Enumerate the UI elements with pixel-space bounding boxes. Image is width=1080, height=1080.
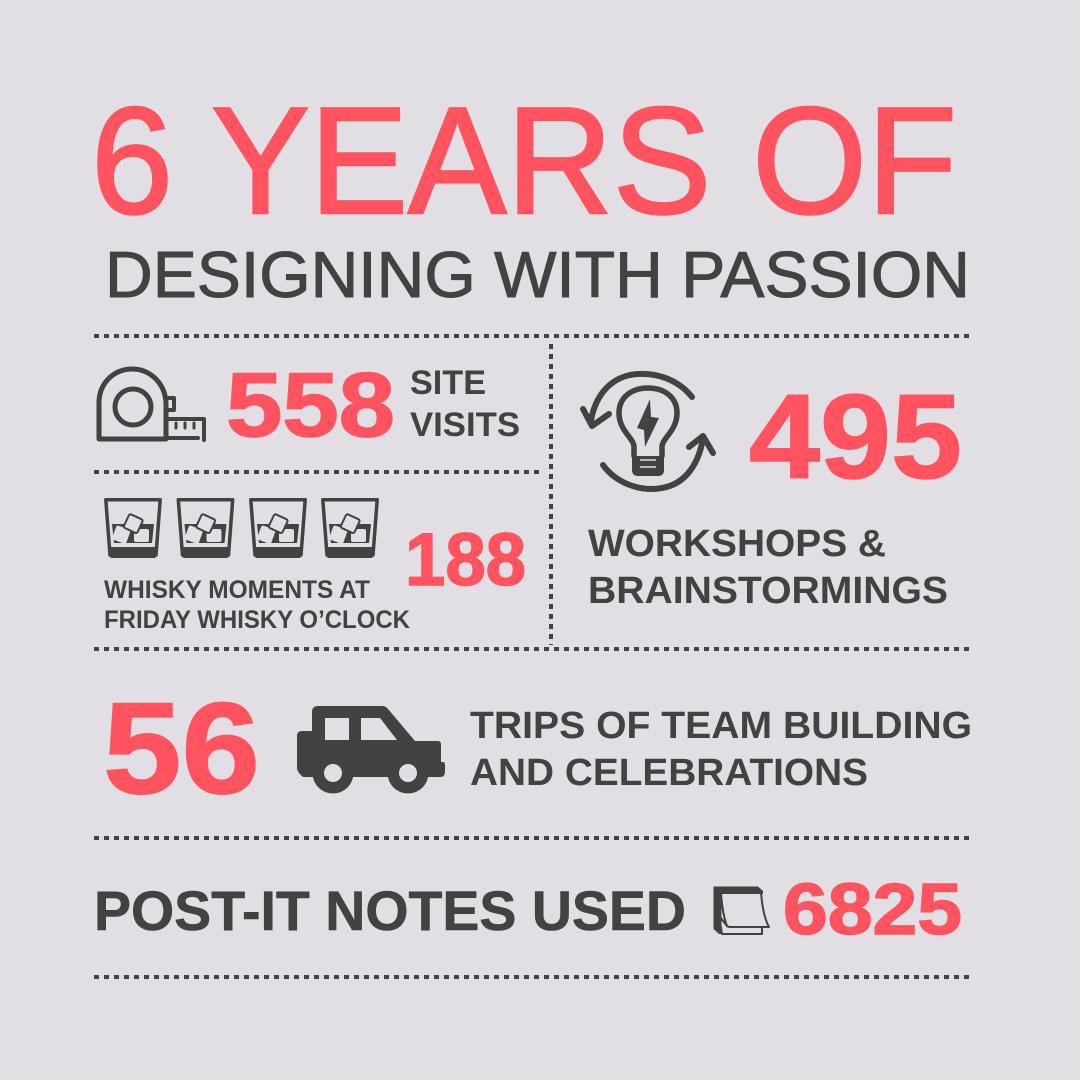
- stat: 6825: 6825: [783, 870, 962, 950]
- icon: whisky glass 3: [251, 500, 305, 558]
- label: whisky moments: FRIDAY WHISKY O’CLOCK: [104, 606, 410, 634]
- label: post-it notes used: POST-IT NOTES USED: [94, 879, 686, 942]
- title: DESIGNING WITH PASSION: [105, 238, 970, 311]
- panel: whisky moments: [104, 500, 526, 634]
- label: workshops and brainstormings: WORKSHOPS &: [588, 523, 886, 565]
- icon: whisky glass 1: [106, 500, 160, 558]
- label: whisky moments: [104, 576, 410, 634]
- panel: post-it notes: [94, 870, 962, 950]
- stat: 188: 188: [405, 518, 526, 601]
- icon: whisky glass 4: [323, 500, 377, 558]
- icon: post-it note: [714, 886, 769, 934]
- label: site visits: [410, 364, 520, 444]
- icon: car: [297, 706, 445, 794]
- label: team trips: TRIPS OF TEAM BUILDING: [470, 705, 972, 747]
- panel: workshops: [583, 370, 962, 612]
- stat: 495: 495: [749, 370, 962, 504]
- panel: site visits: [99, 355, 520, 456]
- label: whisky moments: WHISKY MOMENTS AT: [104, 576, 370, 604]
- label: site visits: SITE: [410, 364, 486, 402]
- label: workshops and brainstormings: [588, 523, 948, 612]
- icon: light bulb with cycle arrows: [583, 374, 713, 489]
- icon: whisky glasses: [106, 500, 377, 558]
- icon: tape measure: [99, 369, 204, 440]
- icon: whisky glass 2: [178, 500, 233, 558]
- title: 6 YEARS OF: [91, 76, 957, 246]
- label: site visits: VISITS: [410, 406, 520, 444]
- stat: 558: 558: [226, 355, 395, 456]
- panel: team trips: [103, 675, 972, 821]
- label: team trips: [470, 705, 972, 794]
- label: team trips: AND CELEBRATIONS: [470, 752, 868, 794]
- stat: 56: 56: [103, 675, 260, 821]
- label: workshops and brainstormings: BRAINSTORMINGS: [588, 570, 948, 612]
